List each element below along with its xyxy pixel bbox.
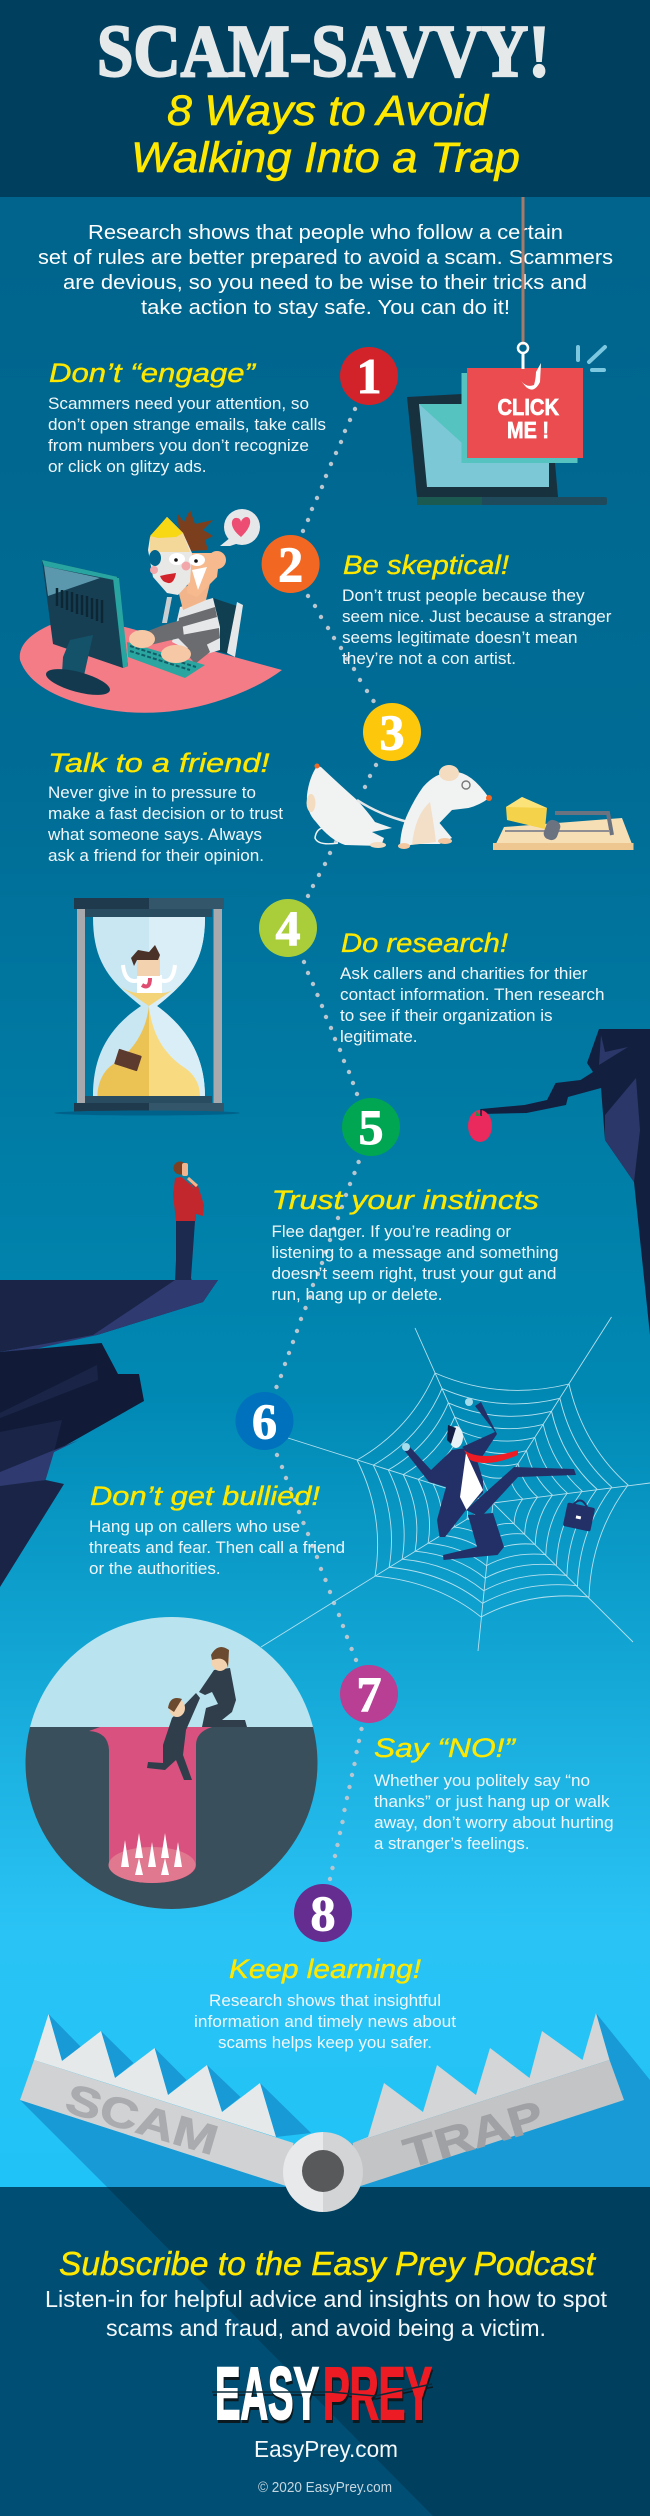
step 1 heading and text: don’t open strange emails, take calls: [48, 416, 326, 434]
step 5 number badge: 5: [358, 1099, 384, 1155]
step 4 heading and text: [340, 928, 604, 1046]
jacket: [404, 1446, 483, 1537]
intro paragraph: take action to stay safe. You can do it!: [141, 296, 510, 319]
hands: [129, 630, 155, 648]
subtitle: Walking Into a Trap: [131, 134, 520, 182]
frame: [77, 909, 85, 1103]
title: SCAM-SAVVY!: [97, 11, 550, 93]
step 2 heading and text: seems legitimate doesn’t mean: [342, 629, 578, 647]
lead mouse: [400, 772, 489, 848]
step 6 heading and text: [89, 1481, 345, 1578]
step 4 heading and text: Do research!: [341, 928, 509, 958]
speech bubble with heart: [224, 509, 260, 545]
legs: [466, 1467, 576, 1517]
footer text: Listen-in for helpful advice and insights on how to spot: [45, 2286, 608, 2312]
long shadows: [20, 2100, 320, 2187]
illustration: masked scammer at a computer: [20, 509, 282, 713]
step 5 number badge: [342, 1098, 400, 1156]
step 2 heading and text: they’re not a con artist.: [342, 650, 516, 668]
step 3 heading and text: [47, 748, 283, 865]
step 8 heading and text: scams helps keep you safer.: [218, 2034, 432, 2052]
mask: [148, 517, 192, 595]
head: [174, 1162, 186, 1174]
apple: [468, 1110, 492, 1142]
step 3 number badge: 3: [380, 704, 404, 760]
left jaw: [34, 2014, 276, 2137]
step 1 number badge: 1: [356, 348, 382, 404]
pit: [89, 1727, 212, 1883]
step 1 heading and text: or click on glitzy ads.: [48, 458, 206, 476]
step 4 heading and text: legitimate.: [340, 1028, 418, 1046]
man in sand: [123, 965, 175, 981]
step 8 heading and text: information and timely news about: [194, 2013, 456, 2031]
intro paragraph: are devious, so you need to be wise to their tricks and: [63, 271, 587, 294]
step 2 heading and text: Don’t trust people because they: [342, 587, 585, 605]
icon: laptop with fishing hook and click-me card: ME !: [507, 417, 549, 443]
step 8 heading and text: Research shows that insightful: [209, 1992, 441, 2010]
step 3 heading and text: what someone says. Always: [47, 826, 262, 844]
mouse being pulled: [307, 766, 392, 846]
keyboard: [127, 642, 205, 678]
step 6 heading and text: Hang up on callers who use: [89, 1518, 300, 1536]
step 5 heading and text: [272, 1185, 558, 1304]
illustration: man on cliff looking up: [0, 1162, 218, 1587]
intro paragraph: set of rules are better prepared to avoid a scam. Scammers: [38, 246, 613, 269]
step 1 heading and text: Scammers need your attention, so: [48, 395, 309, 413]
jaw labels: SCAM: [60, 2075, 223, 2164]
header band: [0, 0, 650, 197]
step 2 heading and text: seem nice. Just because a stranger: [342, 608, 612, 626]
step 3 heading and text: Never give in to pressure to: [48, 784, 256, 802]
fishing line: [522, 197, 524, 345]
step 2 heading and text: [342, 550, 612, 668]
legs: [175, 1221, 195, 1281]
step 7 heading and text: Whether you politely say “no: [374, 1772, 590, 1790]
red jacket: [173, 1176, 204, 1221]
footer podcast heading: Subscribe to the Easy Prey Podcast: [59, 2245, 597, 2282]
monitor stand: [62, 635, 93, 680]
monitor: [42, 560, 128, 668]
step 1 heading and text: from numbers you don’t recognize: [48, 437, 309, 455]
step 6 heading and text: or the authorities.: [89, 1560, 221, 1578]
step 4 number badge: [259, 899, 317, 957]
step 8 number badge: [294, 1884, 352, 1942]
illustration: businessman caught in a spider web: [261, 1317, 650, 1651]
footer text: [45, 2286, 608, 2341]
cheese: [506, 797, 547, 829]
icon: laptop with fishing hook and click-me card: [407, 197, 607, 505]
step 8 heading and text: [194, 1954, 456, 2052]
step 7 heading and text: thanks” or just hang up or walk: [374, 1793, 610, 1811]
step 5 heading and text: doesn’t seem right, trust your gut and: [272, 1265, 556, 1283]
step 1 heading and text: [48, 358, 326, 476]
tail between mice: [357, 800, 408, 822]
step 7 number badge: 7: [356, 1666, 382, 1722]
step 5 heading and text: run, hang up or delete.: [272, 1286, 442, 1304]
step 7 heading and text: Say “NO!”: [374, 1733, 516, 1763]
illustration: businessman in an hourglass: [54, 898, 240, 1116]
step 1 number badge: [340, 347, 398, 405]
cliff: [0, 1280, 218, 1352]
step 2 number badge: [262, 535, 320, 593]
dotted path connecting the steps: [274, 407, 378, 1881]
mousetrap: [493, 818, 634, 850]
subtitle: [131, 87, 520, 182]
step 5 heading and text: listening to a message and something: [272, 1244, 558, 1262]
step 3 number badge: [363, 703, 421, 761]
rescued man: [147, 1693, 200, 1780]
step 6 number badge: [236, 1392, 294, 1450]
background: deepening blue gradient: [0, 197, 650, 2187]
footer text: scams and fraud, and avoid being a victim.: [106, 2315, 546, 2341]
step 6 heading and text: Don’t get bullied!: [90, 1481, 321, 1511]
footer panel background: [0, 2187, 650, 2516]
illustration: steel bear trap labelled scam and trap: [20, 2013, 650, 2212]
illustration: mice and mousetrap: [306, 764, 634, 850]
step 6 heading and text: threats and fear. Then call a friend: [89, 1539, 345, 1557]
intro paragraph: Research shows that people who follow a certain: [88, 221, 563, 244]
sparks: [578, 347, 605, 370]
subtitle: 8 Ways to Avoid: [167, 87, 490, 135]
step 4 heading and text: Ask callers and charities for thier: [340, 965, 588, 983]
Easy Prey logo: PREY: [323, 2352, 432, 2435]
hair: [177, 510, 213, 551]
sand: [118, 985, 180, 1006]
man: [402, 1398, 576, 1560]
step 5 heading and text: Flee danger. If you’re reading or: [272, 1223, 512, 1241]
head: [449, 1426, 463, 1448]
step 8 number badge: 8: [310, 1885, 336, 1941]
illustration: steel bear trap labelled scam and trap: TRAP: [398, 2091, 549, 2177]
illustration: man pulling another out of a pit: [25, 1617, 317, 1909]
step 2 number badge: 2: [278, 536, 303, 592]
step 4 heading and text: to see if their organization is: [340, 1007, 553, 1025]
rescuer: [199, 1668, 247, 1727]
step 4 number badge: 4: [276, 900, 300, 956]
spikes: [121, 1833, 182, 1875]
intro paragraph: [38, 221, 613, 319]
head: [178, 575, 212, 610]
card text: CLICK: [498, 394, 559, 420]
website: EasyPrey.com: [254, 2436, 398, 2462]
step 3 heading and text: Talk to a friend!: [48, 748, 270, 778]
step 8 heading and text: Keep learning!: [229, 1954, 422, 1984]
step 5 heading and text: Trust your instincts: [272, 1185, 539, 1215]
step 1 heading and text: Don’t “engage”: [49, 358, 256, 388]
briefcase: [563, 1502, 595, 1532]
illustration: shadowy figure holding out an apple: [468, 1029, 650, 1335]
right jaw: [352, 2013, 610, 2143]
chair: [212, 598, 237, 654]
step 3 heading and text: ask a friend for their opinion.: [48, 847, 264, 865]
copyright: © 2020 EasyPrey.com: [258, 2480, 392, 2496]
glass: [93, 917, 205, 1096]
briefcase: [114, 1049, 142, 1071]
step 2 heading and text: Be skeptical!: [343, 550, 510, 580]
step 4 heading and text: contact information. Then research: [340, 986, 604, 1004]
step 7 heading and text: a stranger’s feelings.: [374, 1835, 530, 1853]
step 3 heading and text: make a fast decision or to trust: [48, 805, 283, 823]
shirt and tie: [460, 1453, 483, 1510]
step 6 number badge: 6: [252, 1393, 277, 1449]
desk: [20, 625, 282, 713]
step 7 number badge: [340, 1665, 398, 1723]
Easy Prey logo: EASY: [215, 2352, 319, 2435]
spider web: [261, 1317, 650, 1651]
hinge: [283, 2132, 323, 2212]
step 7 heading and text: [374, 1733, 614, 1853]
step 7 heading and text: away, don’t worry about hurting: [374, 1814, 614, 1832]
torso: [172, 598, 220, 656]
